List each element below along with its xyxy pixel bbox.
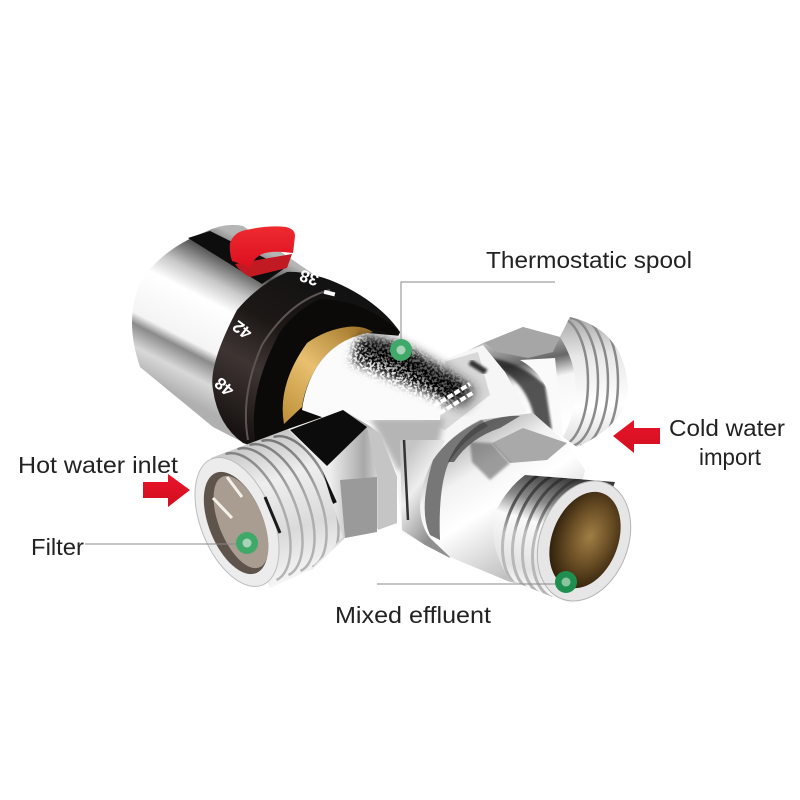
temperature cap <box>132 225 474 448</box>
rear cold water pipe <box>468 317 628 447</box>
rear thread <box>560 317 628 447</box>
cast lettering on the body <box>434 384 474 413</box>
temperature ring <box>212 272 400 448</box>
rear hex <box>484 327 560 358</box>
main valve body <box>330 333 527 558</box>
ring opening <box>254 299 400 446</box>
marker: thermostatic spool <box>390 339 412 361</box>
outlet hex <box>492 428 567 463</box>
label: hot water inlet: Hot water inlet <box>18 452 179 478</box>
red handle <box>230 226 295 277</box>
leader line: mixed effluent <box>377 583 566 585</box>
dark stripe on cap <box>188 231 285 284</box>
label: cold water import: import <box>699 444 762 470</box>
cap cylinder <box>132 225 322 446</box>
front right mixed outlet <box>420 413 632 602</box>
inlet thread <box>211 429 343 588</box>
valve illustration <box>132 225 647 615</box>
dial numbers: 38 <box>297 266 321 289</box>
arrow: cold water import <box>613 420 660 453</box>
label: mixed effluent: Mixed effluent <box>335 602 492 628</box>
label: filter: Filter <box>31 534 84 560</box>
inlet nut <box>288 410 397 570</box>
infographic: thermostatic valve diagram <box>20 224 785 623</box>
leader line: thermostatic spool <box>401 282 555 348</box>
dial numbers <box>211 266 335 400</box>
label: cold water import <box>669 415 785 470</box>
leader line: filter <box>85 543 247 545</box>
dark speckled band on body <box>352 338 470 404</box>
outlet thread <box>493 475 615 604</box>
filter mesh <box>191 463 281 583</box>
arrow: hot water inlet <box>143 474 190 507</box>
label: cold water import: Cold water <box>669 415 785 441</box>
brass insert <box>283 327 373 424</box>
inlet face <box>178 445 296 599</box>
marker: mixed effluent <box>555 571 577 593</box>
outlet mouth <box>521 467 647 615</box>
marker: filter <box>236 532 258 554</box>
dial numbers: 42 <box>229 316 256 343</box>
outlet nut <box>420 413 585 590</box>
dial numbers: 48 <box>211 373 238 400</box>
label: thermostatic spool: Thermostatic spool <box>486 247 692 273</box>
bright body tube <box>302 333 445 420</box>
front left filter inlet <box>194 410 397 588</box>
